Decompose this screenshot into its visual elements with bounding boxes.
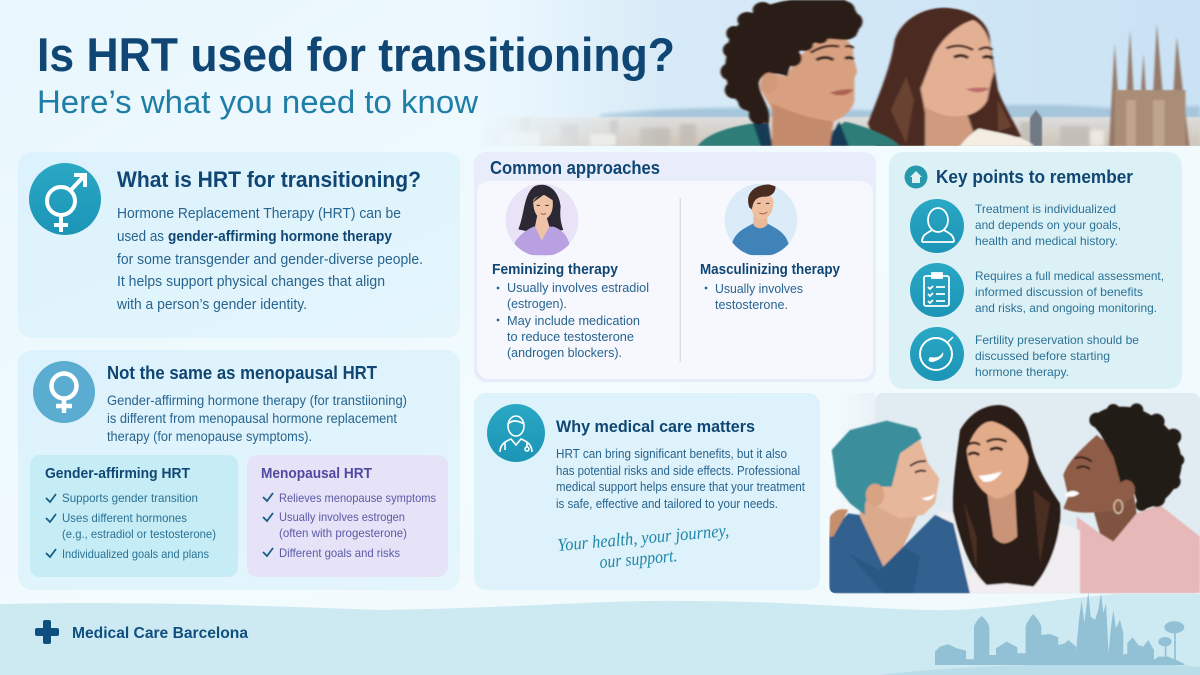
footer hill — [880, 664, 1200, 675]
card: menopausal HRT: Menopausal HRT — [261, 465, 372, 482]
point: fertility preservation: Fertility preservation should be — [975, 333, 1139, 347]
card: gender-affirming HRT: Individualized goals and plans — [62, 547, 209, 561]
card: menopausal HRT: Usually involves estrogen — [279, 510, 405, 524]
feminizing therapy: May include medication — [507, 313, 640, 328]
card: menopausal HRT: Relieves menopause symptoms — [279, 491, 436, 505]
handwritten tagline — [557, 520, 730, 572]
heading: What is HRT for transitioning? — [117, 167, 421, 192]
feminizing therapy: (estrogen). — [507, 296, 567, 311]
body text: medical support helps ensure that your treatment — [556, 480, 805, 494]
footer brand: Medical Care Barcelona — [72, 625, 248, 642]
heading: Common approaches — [490, 158, 660, 178]
card: menopausal HRT: Different goals and risks — [279, 546, 400, 560]
point: medical assessment: informed discussion of benefits — [975, 285, 1143, 299]
footer brand — [35, 620, 248, 644]
panel: not the same as menopausal HRT — [18, 350, 460, 590]
feminizing therapy: to reduce testosterone — [507, 329, 634, 344]
body text: Hormone Replacement Therapy (HRT) can be — [117, 205, 401, 222]
body text: for some transgender and gender-diverse people. — [117, 251, 423, 268]
person: woman with long brown hair — [868, 8, 1034, 146]
photo: three friends smiling — [829, 393, 1200, 594]
body text — [556, 447, 805, 511]
panel: what is HRT for transitioning — [18, 152, 460, 338]
icon: female symbol — [33, 361, 95, 423]
feminizing therapy: (androgen blockers). — [507, 345, 622, 360]
title: Is HRT used for transitioning? — [37, 28, 675, 81]
icon: doctor — [487, 404, 545, 462]
icon: medical cross — [35, 620, 59, 644]
card: gender-affirming HRT: (e.g., estradiol or testosterone) — [62, 527, 216, 541]
masculinizing therapy: Usually involves — [715, 281, 803, 296]
point: medical assessment: Requires a full medical assessment, — [975, 269, 1164, 283]
masculinizing therapy: testosterone. — [715, 297, 788, 312]
header band with photo of two people and Barcelona skyline — [480, 0, 1200, 146]
feminizing therapy: Feminizing therapy — [492, 262, 618, 278]
card: gender-affirming HRT: Gender-affirming HRT — [45, 465, 190, 482]
heading: Not the same as menopausal HRT — [107, 363, 377, 383]
body text: has potential risks and side effects. Professional — [556, 464, 800, 478]
body text: HRT can bring significant benefits, but it also — [556, 447, 787, 461]
heading: Why medical care matters — [556, 417, 755, 436]
description: is different from menopausal hormone replacement — [107, 411, 397, 426]
masculinizing therapy: Masculinizing therapy — [700, 262, 840, 278]
divider — [680, 198, 681, 362]
body text: with a person’s gender identity. — [116, 296, 307, 313]
footer wave — [0, 594, 1200, 675]
point: fertility preservation: discussed before starting — [975, 349, 1110, 363]
heading: Key points to remember — [936, 167, 1133, 187]
masculinizing therapy — [700, 262, 840, 312]
panel: common approaches — [474, 152, 876, 382]
icon: transgender symbol — [29, 163, 101, 235]
person: curly dark hair, teal jacket — [698, 0, 900, 146]
feminizing therapy — [492, 262, 649, 360]
avatar: feminine person — [506, 184, 578, 256]
cathedral spires — [1109, 23, 1189, 146]
handwritten tagline: Your health, your journey, — [557, 520, 730, 555]
card: gender-affirming HRT — [30, 455, 238, 577]
description: Gender-affirming hormone therapy (for transtiioning) — [107, 393, 407, 408]
point: individualized treatment: and depends on your goals, — [975, 218, 1121, 232]
card: gender-affirming HRT: Supports gender transition — [62, 491, 198, 505]
body text — [116, 205, 423, 313]
body text: is safe, effective and tailored to your needs. — [556, 497, 778, 511]
point: individualized treatment — [910, 199, 1121, 253]
body text: gender-affirming hormone therapy — [168, 228, 393, 245]
point: individualized treatment: Treatment is individualized — [975, 202, 1116, 216]
card: gender-affirming HRT: Uses different hormones — [62, 511, 187, 525]
person: right, curly hair — [1063, 403, 1200, 593]
skyline silhouette — [935, 592, 1185, 665]
person: left, teal hair, denim shirt — [829, 421, 970, 593]
description: therapy (for menopause symptoms). — [107, 429, 312, 444]
feminizing therapy: Usually involves estradiol — [507, 280, 649, 295]
point: medical assessment: and risks, and ongoing monitoring. — [975, 301, 1157, 315]
avatar: masculine person — [724, 184, 798, 256]
card: menopausal HRT — [247, 455, 448, 577]
person: middle, long dark hair — [938, 405, 1080, 593]
panel: key points to remember — [889, 152, 1182, 389]
point: fertility preservation — [910, 327, 1139, 381]
point: medical assessment — [910, 263, 1164, 317]
body text: used as — [117, 228, 164, 245]
description — [107, 393, 407, 444]
icon: small key points badge — [904, 166, 928, 188]
handwritten tagline: our support. — [599, 545, 678, 572]
card: menopausal HRT: (often with progesterone) — [279, 526, 407, 540]
point: fertility preservation: hormone therapy. — [975, 365, 1069, 379]
panel: why medical care matters — [474, 393, 820, 590]
body text: It helps support physical changes that align — [117, 273, 385, 290]
point: individualized treatment: health and medical history. — [975, 234, 1118, 248]
subtitle: Here’s what you need to know — [37, 84, 479, 120]
